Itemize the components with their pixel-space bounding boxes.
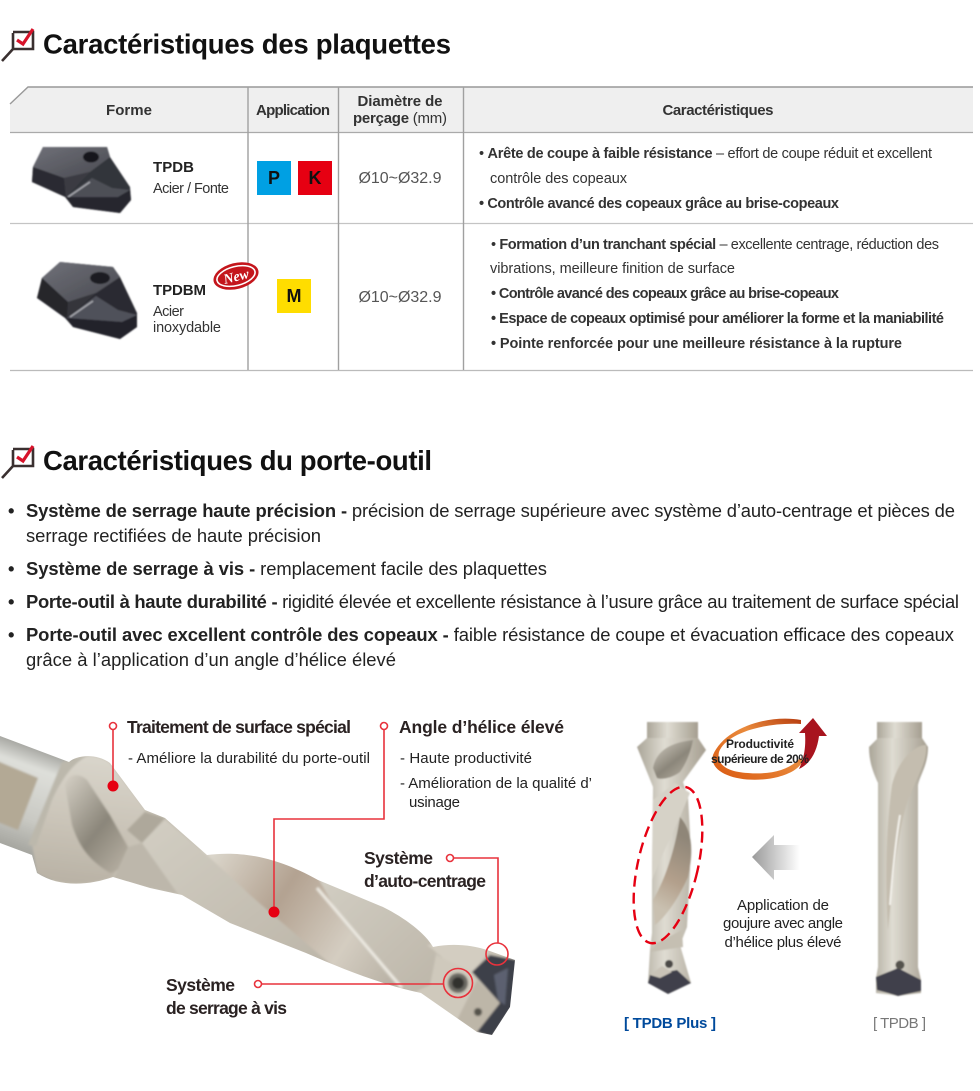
icon: checkbox magnifier xyxy=(2,29,33,61)
features xyxy=(490,237,944,352)
text block: holder feature list: Porte-outil à haute durabilité - rigidité élevée et excellente résistance à l’usure grâce au traitement de surface spécial xyxy=(26,591,959,612)
text block: holder feature list xyxy=(8,500,959,670)
badge: new xyxy=(211,258,261,294)
leader line xyxy=(108,722,118,792)
table header: Application xyxy=(256,102,330,119)
features: • Arête de coupe à faible résistance – effort de coupe réduit et excellent xyxy=(479,146,932,162)
callout heading: Système xyxy=(364,848,433,868)
text block: holder feature list: grâce à l’application d’un angle d’hélice élevé xyxy=(26,649,396,670)
callout text: usinage xyxy=(409,794,460,811)
text block: holder feature list: • xyxy=(8,624,14,645)
callout heading: Système xyxy=(166,975,235,995)
badge: P: P xyxy=(268,168,280,188)
callout text: Productivité xyxy=(726,737,794,751)
icon: TPDBM insert xyxy=(37,262,137,339)
heading text: Caractéristiques du porte-outil xyxy=(43,445,432,476)
callout heading xyxy=(364,848,486,891)
leader line xyxy=(446,854,508,965)
panel: insert table xyxy=(10,87,973,370)
features xyxy=(479,146,932,212)
badge: K xyxy=(298,161,332,195)
features: • Pointe renforcée pour une meilleure résistance à la rupture xyxy=(491,336,902,352)
material xyxy=(153,304,221,336)
table header: Caractéristiques xyxy=(662,102,774,119)
illustration: TPDB Plus drill xyxy=(637,722,706,994)
illustration: main drill xyxy=(0,730,525,1040)
section heading: insert features xyxy=(2,28,451,61)
row: TPDBM xyxy=(37,237,944,352)
callout heading: d’auto-centrage xyxy=(364,871,486,891)
callout: self-centering xyxy=(364,848,508,965)
highlight: dashed ellipse xyxy=(621,780,715,950)
material: Acier / Fonte xyxy=(153,181,229,197)
leader line xyxy=(268,722,388,918)
illustration: TPDB drill xyxy=(869,722,928,996)
features: • Contrôle avancé des copeaux grâce au brise-copeaux xyxy=(491,286,839,302)
callout text xyxy=(400,750,592,811)
material: Acier xyxy=(153,304,184,320)
callout text: supérieure de 20% xyxy=(711,752,809,766)
leader line xyxy=(254,968,472,998)
text block: holder feature list: • xyxy=(8,500,14,521)
text block: holder feature list: serrage rectifiées de haute précision xyxy=(26,525,321,546)
text block: application note: d’hélice plus élevé xyxy=(724,934,842,951)
badge: M: M xyxy=(286,286,302,306)
text block: holder feature list: Système de serrage haute précision - précision de serrage supérieure avec système d’auto-centrage et pièces de xyxy=(26,500,955,521)
heading text: Caractéristiques des plaquettes xyxy=(43,28,451,60)
callout: productivity xyxy=(711,718,827,780)
callout: screw clamping xyxy=(166,968,472,1018)
label: TPDB: [ TPDB ] xyxy=(873,1015,926,1032)
callout: surface treatment xyxy=(108,717,370,792)
callout: helix angle xyxy=(268,717,592,918)
text block: holder feature list: Système de serrage à vis - remplacement facile des plaquettes xyxy=(26,558,547,579)
text block: holder feature list: • xyxy=(8,591,14,612)
features: • Espace de copeaux optimisé pour améliorer la forme et la maniabilité xyxy=(491,311,944,327)
table header: perçage (mm) xyxy=(353,110,447,127)
text block: application note: Application de xyxy=(737,897,829,914)
arrow: left xyxy=(752,835,800,880)
icon: swoosh arrow xyxy=(713,718,827,780)
features: • Formation d’un tranchant spécial – excellente centrage, réduction des xyxy=(491,237,939,253)
product name: TPDBM xyxy=(153,282,206,299)
badge: new: New xyxy=(221,267,251,288)
callout text: - Amélioration de la qualité d’ xyxy=(400,775,592,792)
product name: TPDB xyxy=(153,159,194,176)
features: • Contrôle avancé des copeaux grâce au brise-copeaux xyxy=(479,196,839,212)
drilling diameter: Ø10~Ø32.9 xyxy=(358,289,442,306)
text block: application note: goujure avec angle xyxy=(723,915,843,932)
badge: K: K xyxy=(308,168,322,188)
badge: M xyxy=(277,279,311,313)
callout heading: Angle d’hélice élevé xyxy=(399,717,564,737)
label: TPDB Plus: [ TPDB Plus ] xyxy=(624,1015,716,1032)
callout text: - Améliore la durabilité du porte-outil xyxy=(128,750,370,767)
table header: Diamètre de xyxy=(358,93,442,110)
material: inoxydable xyxy=(153,320,221,336)
callout text xyxy=(711,737,809,766)
icon: TPDB insert xyxy=(32,147,131,213)
features: vibrations, meilleure finition de surface xyxy=(490,261,735,277)
text block: holder feature list: • xyxy=(8,558,14,579)
callout heading: Traitement de surface spécial xyxy=(127,717,351,737)
row: TPDB xyxy=(32,146,932,213)
callout text: - Haute productivité xyxy=(400,750,532,767)
features: contrôle des copeaux xyxy=(490,171,628,187)
table header: Forme xyxy=(106,102,152,119)
text block: application note xyxy=(723,897,843,951)
callout heading xyxy=(166,975,287,1018)
table header xyxy=(10,87,973,132)
callout heading: de serrage à vis xyxy=(166,998,287,1018)
text block: holder feature list: Porte-outil avec excellent contrôle des copeaux - faible résistance de coupe et évacuation efficace des copeaux xyxy=(26,624,954,645)
badge: P xyxy=(257,161,291,195)
section heading: holder features xyxy=(2,445,432,478)
icon: checkbox magnifier xyxy=(2,446,33,478)
drilling diameter: Ø10~Ø32.9 xyxy=(358,170,442,187)
